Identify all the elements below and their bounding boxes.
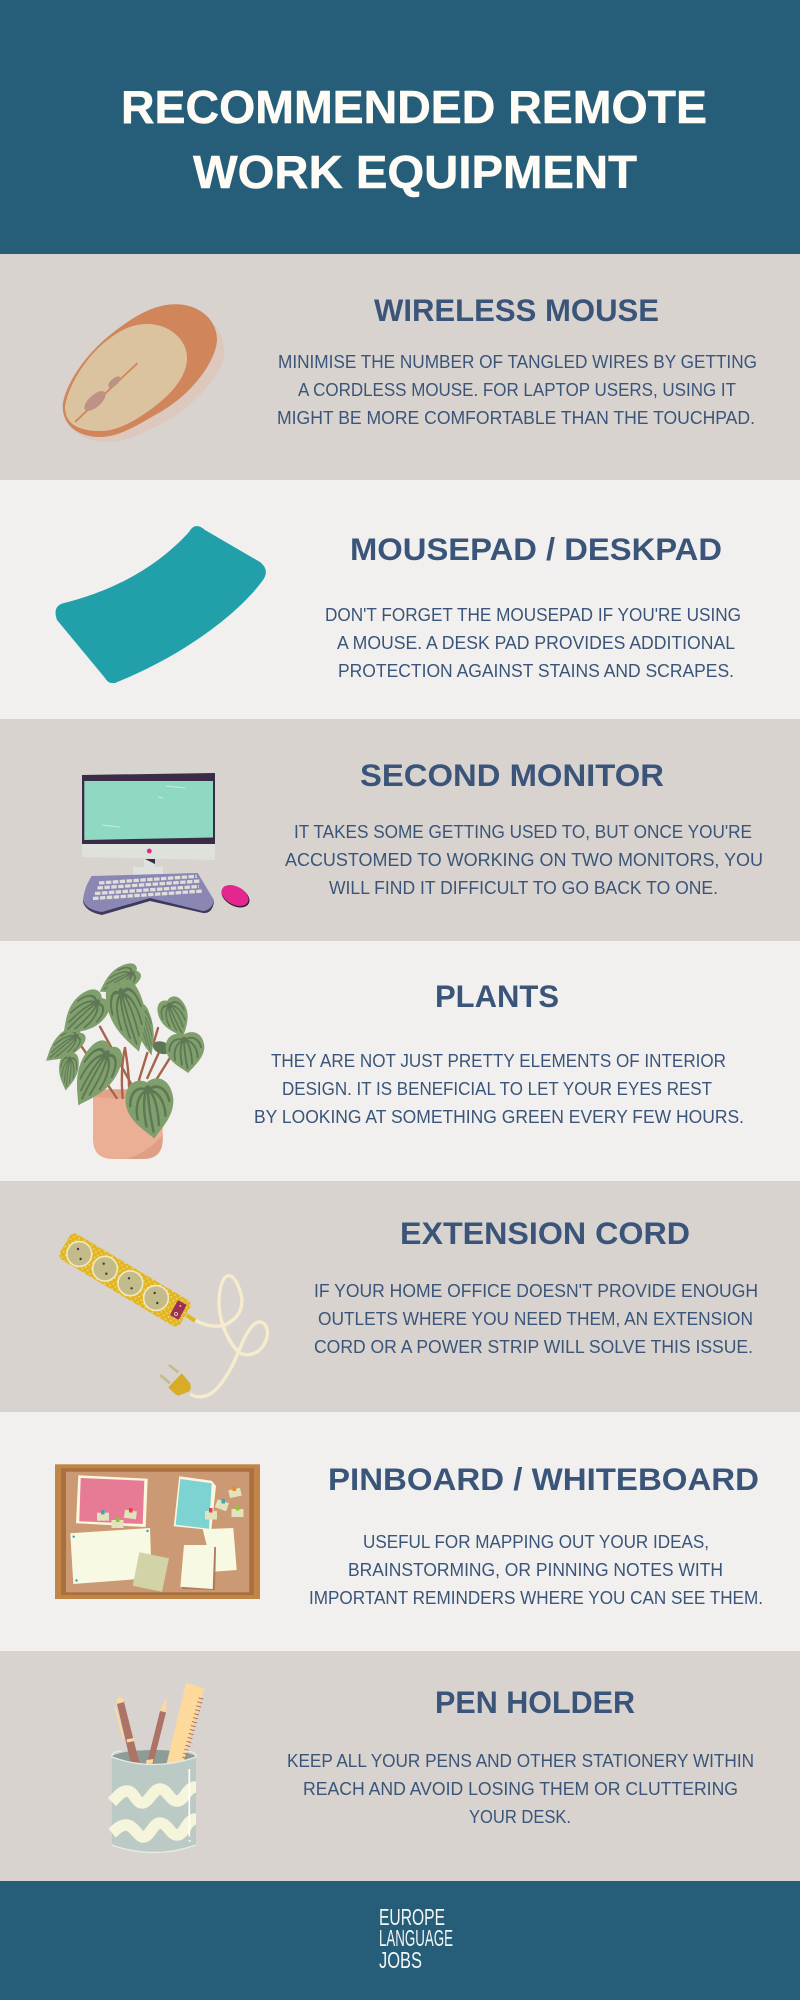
title: WORK EQUIPMENT <box>193 146 637 198</box>
text: plants description: BY LOOKING AT SOMETHING GREEN EVERY FEW HOURS. <box>254 1106 744 1127</box>
heading: extension cord: EXTENSION CORD <box>400 1215 690 1251</box>
switch <box>170 1300 187 1320</box>
sticky notes with tacks <box>72 1486 244 1582</box>
header banner <box>0 0 800 254</box>
text: plants description: THEY ARE NOT JUST PRETTY ELEMENTS OF INTERIOR <box>271 1050 726 1071</box>
logo: Europe Language Jobs: EUROPE <box>379 1904 445 1930</box>
notes <box>70 1528 237 1592</box>
panel: mousepad <box>0 480 800 719</box>
cup body <box>112 1757 196 1852</box>
plug <box>160 1365 191 1396</box>
text: wireless mouse description: MIGHT BE MORE COMFORTABLE THAN THE TOUCHPAD. <box>277 407 755 428</box>
text: pinboard description: IMPORTANT REMINDERS WHERE YOU CAN SEE THEM. <box>309 1587 763 1608</box>
logo: Europe Language Jobs: LANGUAGE <box>379 1925 453 1951</box>
heading: wireless mouse: WIRELESS MOUSE <box>374 292 659 328</box>
icon: wireless mouse <box>63 304 224 442</box>
text: pen holder description: KEEP ALL YOUR PENS AND OTHER STATIONERY WITHIN <box>287 1750 754 1771</box>
title: RECOMMENDED REMOTE <box>121 81 707 133</box>
icon: potted plant <box>38 959 207 1159</box>
blue paper <box>174 1476 216 1530</box>
panel: extension cord <box>0 1181 800 1412</box>
text: mousepad description <box>325 604 741 681</box>
text: extension cord description <box>314 1280 758 1357</box>
text: pinboard description <box>309 1531 763 1608</box>
panel: pinboard <box>0 1412 800 1651</box>
title <box>121 81 707 198</box>
cord <box>190 1276 267 1397</box>
sockets <box>67 1242 168 1310</box>
heading: mousepad: MOUSEPAD / DESKPAD <box>350 531 722 567</box>
panel: plants <box>0 941 800 1181</box>
text: plants description: DESIGN. IT IS BENEFICIAL TO LET YOUR EYES REST <box>282 1078 712 1099</box>
text: mousepad description: DON'T FORGET THE MOUSEPAD IF YOU'RE USING <box>325 604 741 625</box>
text: pinboard description: BRAINSTORMING, OR PINNING NOTES WITH <box>348 1559 723 1580</box>
icon: pen holder <box>112 1683 204 1852</box>
text: pen holder description: REACH AND AVOID LOSING THEM OR CLUTTERING <box>303 1778 738 1799</box>
text: pen holder description: YOUR DESK. <box>469 1806 571 1827</box>
heading: pinboard: PINBOARD / WHITEBOARD <box>328 1461 759 1497</box>
icon: pinboard <box>55 1464 260 1599</box>
text: second monitor description: WILL FIND IT DIFFICULT TO GO BACK TO ONE. <box>329 877 718 898</box>
plant pot <box>93 1089 163 1159</box>
panel: wireless mouse <box>0 254 800 480</box>
text: plants description <box>254 1050 744 1127</box>
heading: second monitor: SECOND MONITOR <box>360 757 664 793</box>
logo: Europe Language Jobs <box>379 1904 453 1973</box>
pen <box>115 1697 140 1764</box>
text: second monitor description: IT TAKES SOME GETTING USED TO, BUT ONCE YOU'RE <box>294 821 752 842</box>
heading: pen holder: PEN HOLDER <box>435 1684 635 1720</box>
heading: plants: PLANTS <box>435 978 559 1014</box>
text: pen holder description <box>287 1750 754 1827</box>
icon: computer with keyboard and mouse <box>82 773 253 915</box>
pink paper <box>76 1475 148 1527</box>
panel: second monitor <box>0 719 800 941</box>
icon: mousepad <box>56 526 266 683</box>
power strip body <box>57 1231 195 1329</box>
text: wireless mouse description: A CORDLESS MOUSE. FOR LAPTOP USERS, USING IT <box>298 379 736 400</box>
panel: pen holder <box>0 1651 800 1881</box>
plant stems <box>78 1027 171 1098</box>
text: extension cord description: CORD OR A POWER STRIP WILL SOLVE THIS ISSUE. <box>314 1336 753 1357</box>
text: second monitor description <box>285 821 763 898</box>
text: wireless mouse description <box>277 351 757 428</box>
plant leaves <box>38 959 207 1142</box>
text: mousepad description: PROTECTION AGAINST STAINS AND SCRAPES. <box>338 660 734 681</box>
footer banner <box>0 1881 800 2000</box>
cup highlights <box>112 1751 196 1852</box>
ruler <box>167 1683 204 1763</box>
icon: extension cord <box>57 1231 267 1397</box>
text: extension cord description: OUTLETS WHERE YOU NEED THEM, AN EXTENSION <box>318 1308 753 1329</box>
text: mousepad description: A MOUSE. A DESK PAD PROVIDES ADDITIONAL <box>337 632 735 653</box>
text: second monitor description: ACCUSTOMED TO WORKING ON TWO MONITORS, YOU <box>285 849 763 870</box>
text: wireless mouse description: MINIMISE THE NUMBER OF TANGLED WIRES BY GETTING <box>278 351 757 372</box>
cup interior <box>112 1750 196 1765</box>
pencil <box>146 1697 167 1764</box>
text: pinboard description: USEFUL FOR MAPPING OUT YOUR IDEAS, <box>363 1531 709 1552</box>
logo: Europe Language Jobs: JOBS <box>379 1947 422 1973</box>
cup waves <box>112 1787 196 1837</box>
text: extension cord description: IF YOUR HOME OFFICE DOESN'T PROVIDE ENOUGH <box>314 1280 758 1301</box>
